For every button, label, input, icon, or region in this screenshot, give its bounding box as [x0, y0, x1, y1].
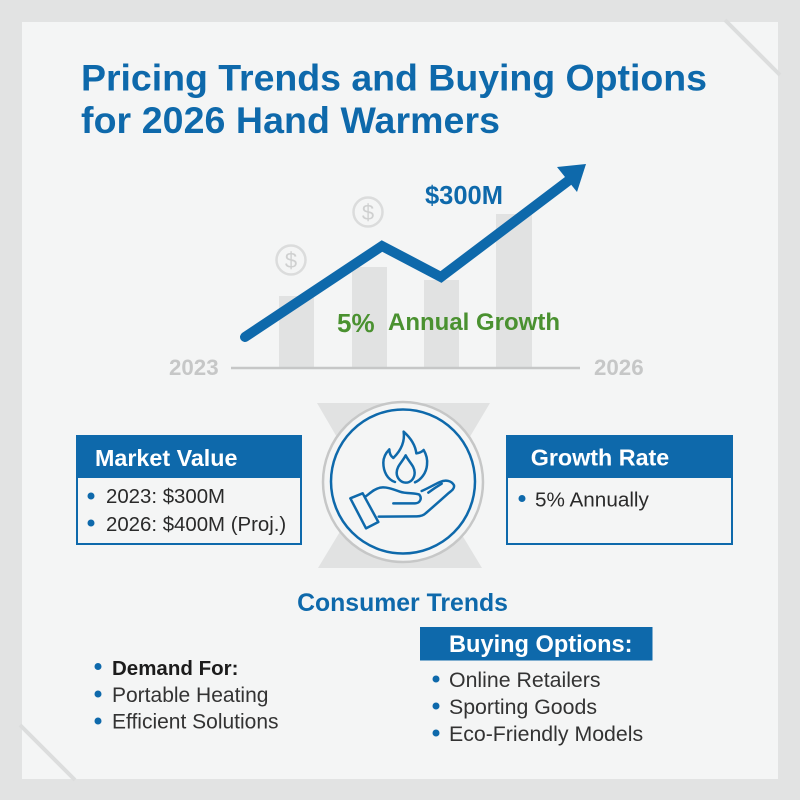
title: Pricing Trends and Buying Options [81, 56, 707, 98]
icon: dollar coin right [354, 198, 382, 226]
list: buying options: Sporting Goods [449, 695, 597, 719]
title [81, 56, 707, 141]
chart bars [279, 214, 532, 368]
axis label 2023: 2023 [169, 355, 219, 380]
heading: market value: Market Value [95, 445, 237, 471]
list: market value [88, 486, 286, 536]
list: demand: Demand For: [112, 657, 238, 680]
hourglass backdrop [317, 403, 490, 568]
list: demand: Portable Heating [112, 684, 268, 707]
panel: buying options [420, 627, 652, 746]
label: annual growth [337, 308, 560, 338]
axis label 2026: 2026 [594, 355, 644, 380]
heading: buying options [420, 627, 652, 660]
list: buying options [432, 668, 643, 746]
chart: market growth [169, 164, 644, 380]
list: demand: Efficient Solutions [112, 710, 279, 734]
title: for 2026 Hand Warmers [81, 99, 500, 141]
list: market value: 2026: $400M (Proj.) [106, 514, 286, 536]
trend arrow [245, 164, 586, 337]
list: demand [94, 657, 279, 734]
list: buying options: Online Retailers [449, 668, 601, 692]
label: annual growth: 5% [337, 308, 375, 338]
icon: hand holding flame [323, 402, 483, 562]
panel: market value [76, 435, 302, 544]
label: value: $300M [425, 182, 503, 210]
label: annual growth: Annual Growth [388, 309, 560, 336]
list: buying options: Eco-Friendly Models [449, 722, 643, 746]
heading: consumer trends: Consumer Trends [297, 590, 508, 617]
heading: buying options: Buying Options: [449, 632, 632, 658]
icon: dollar coin left: $ [285, 248, 297, 273]
list: market value: 2023: $300M [106, 486, 225, 508]
icon: dollar coin left [276, 246, 306, 274]
list: growth rate: 5% Annually [535, 488, 650, 512]
icon: dollar coin right: $ [362, 200, 374, 225]
panel: growth rate [506, 435, 733, 544]
heading: growth rate: Growth Rate [531, 444, 669, 470]
